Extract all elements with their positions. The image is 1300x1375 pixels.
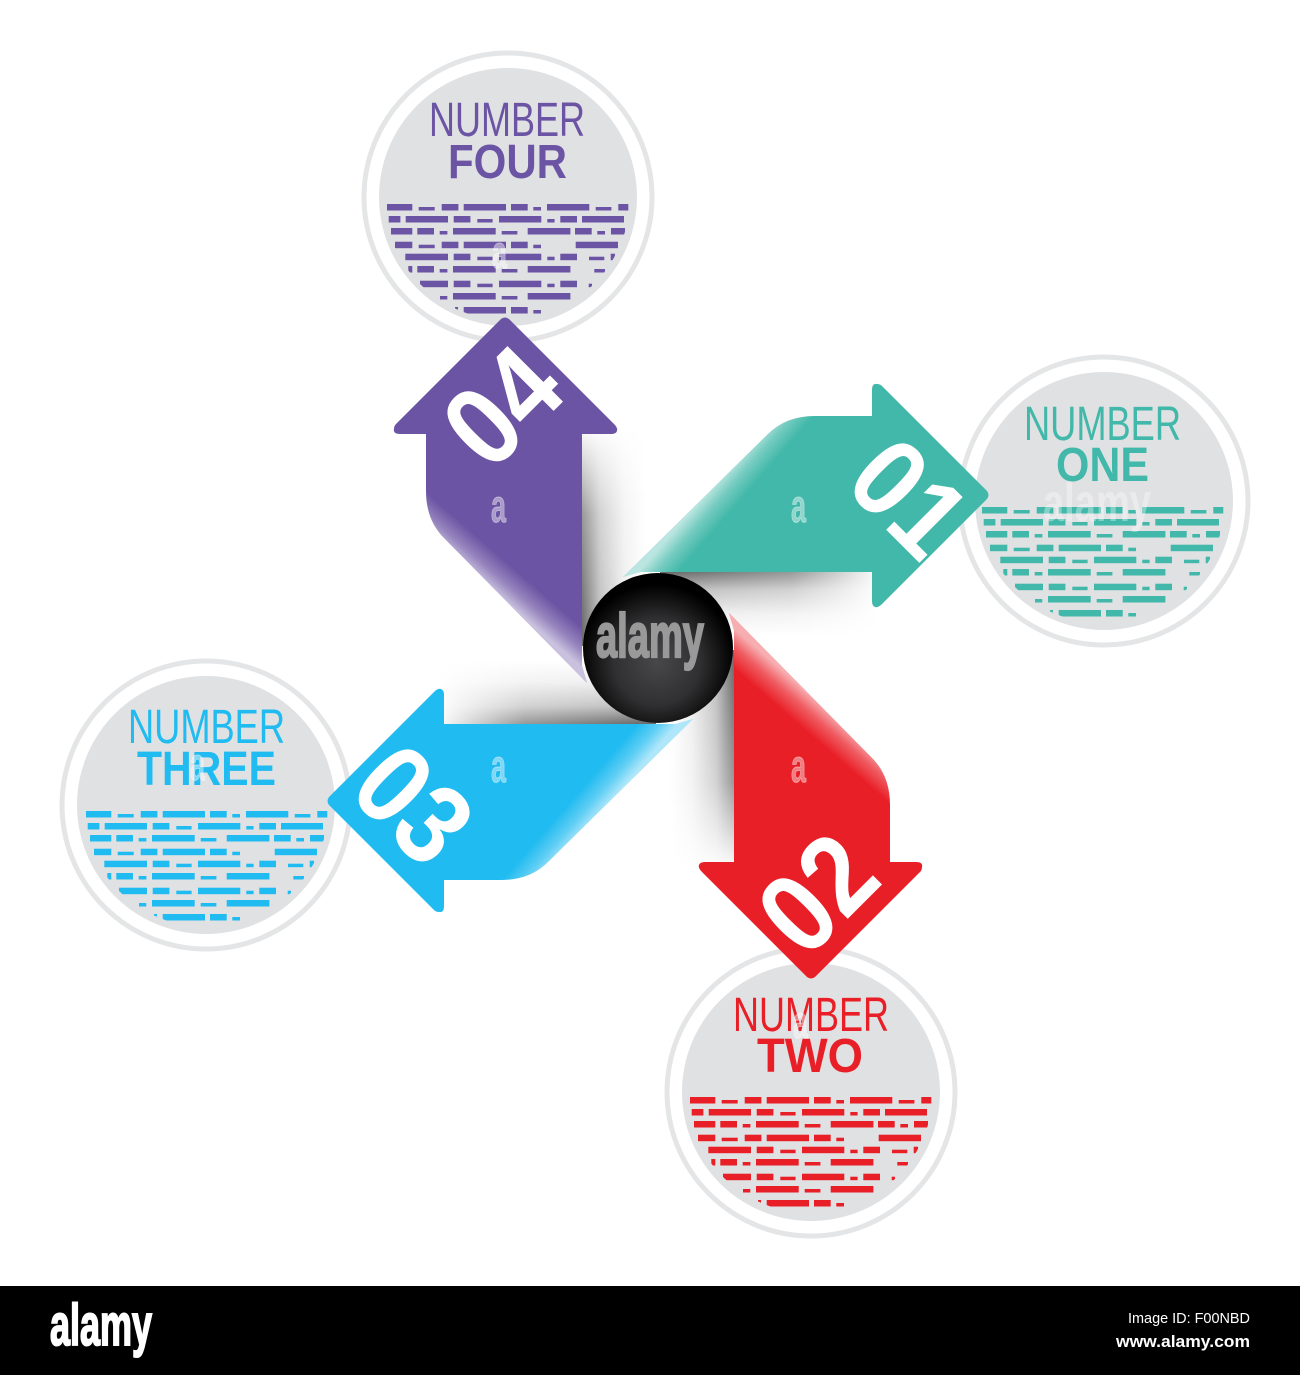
arrow number 02: 02: [734, 810, 903, 979]
ring: [62, 661, 350, 949]
arrow number 01: 01: [825, 414, 993, 582]
heading: number one: ONE: [1056, 439, 1149, 492]
small watermark letters: a: [793, 996, 808, 1048]
heading: number four: FOUR: [448, 136, 567, 189]
heading: number three: THREE: [137, 743, 276, 796]
arrow number 04: 04: [419, 323, 588, 492]
heading: number four: [429, 94, 585, 189]
text placeholder lines: [86, 811, 327, 920]
disc: [682, 963, 940, 1221]
heading: number two: [733, 989, 889, 1083]
center ball: [583, 573, 733, 723]
heading: number three: [128, 701, 285, 796]
disc: [77, 676, 335, 934]
small watermark letters: a: [491, 740, 506, 792]
arrow 01 teal: [623, 384, 988, 607]
heading: number four: NUMBER: [429, 94, 585, 147]
panel: number four: [364, 53, 652, 341]
watermark: alamy: [1043, 473, 1151, 533]
panel: number two: [667, 948, 955, 1236]
arrow 04 purple: [394, 318, 617, 683]
heading: number three: NUMBER: [128, 701, 285, 754]
text placeholder lines: [387, 204, 628, 314]
small watermark letters: a: [791, 480, 806, 532]
heading: number two: NUMBER: [733, 989, 889, 1042]
disc: [975, 372, 1233, 630]
small watermark letters: a: [491, 480, 506, 532]
footer bar: [0, 1286, 1300, 1375]
panel: number one: [960, 357, 1248, 645]
arrow number 03: 03: [328, 721, 497, 890]
small watermark letters: a: [492, 226, 507, 278]
site url: www.alamy.com: [1115, 1332, 1250, 1351]
disc: [379, 68, 637, 326]
arrow 03 blue: [328, 689, 693, 912]
small watermark letters: a: [190, 738, 205, 790]
ring: [364, 53, 652, 341]
footer logo: alamy: [50, 1293, 152, 1358]
heading: number two: TWO: [757, 1030, 863, 1083]
arrow 02 red: [699, 613, 922, 978]
small watermark letters: a: [791, 740, 806, 792]
ring: [667, 948, 955, 1236]
text placeholder lines: [982, 507, 1223, 616]
text placeholder lines: [690, 1097, 931, 1206]
small watermark letters: [190, 226, 808, 1048]
panel: number three: [62, 661, 350, 949]
ring: [960, 357, 1248, 645]
arrow shadows: [436, 426, 880, 870]
image id: Image ID: F00NBD: [1128, 1310, 1250, 1327]
heading: number one: [1024, 398, 1181, 492]
ball watermark: alamy: [596, 602, 704, 671]
heading: number one: NUMBER: [1024, 398, 1181, 451]
